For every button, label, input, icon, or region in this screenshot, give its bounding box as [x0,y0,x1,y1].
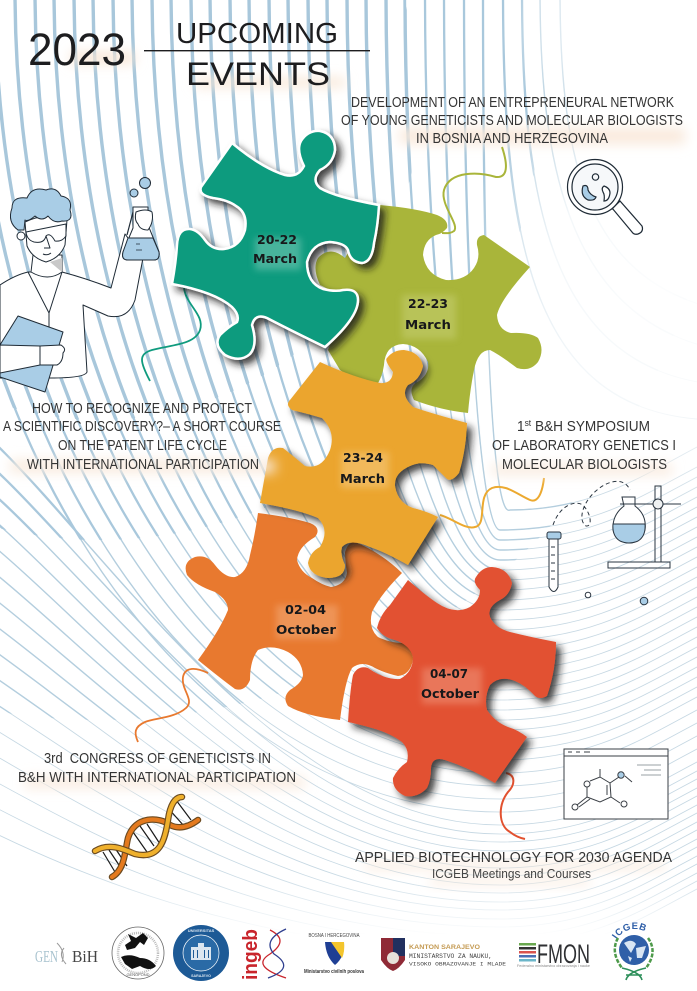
logo: GEN BiH: BiH [72,947,98,966]
puzzle piece: 20-22 March: March [253,251,297,266]
text: symposium event [492,418,676,475]
text: symposium event: OF LABORATORY GENETICS I [492,438,676,454]
string: orange [136,669,208,742]
icon: dna helix [95,797,198,877]
string: amber [440,478,544,527]
bubbles [130,178,150,197]
hair [10,189,71,230]
puzzle piece: 04-07 October: 04-07 [430,666,468,681]
text: patent life cycle event [3,401,281,473]
text: symposium event: MOLECULAR BIOLOGISTS [502,457,667,473]
text: biotechnology event: APPLIED BIOTECHNOLOGY FOR 2030 AGENDA [355,850,672,866]
text: congress event [18,751,305,788]
logo: Kanton Sarajevo: VISOKO OBRAZOVANJE I MLADE [409,962,506,968]
puzzle piece: 23-24 March: March [340,471,385,486]
logo: University of Sarajevo [173,925,229,981]
logo: University of Sarajevo: SARAJEVO [191,974,211,978]
coat [0,234,143,378]
logo: Ministry of Civil Affairs: Ministarstvo civilnih poslova [304,969,364,975]
string: olive [442,147,506,233]
logo: ingeb: ingeb [240,929,262,980]
title: upcoming events [144,18,370,92]
clipboard [0,316,63,392]
puzzle piece: 02-04 October: 02-04 [285,602,326,617]
text: biotechnology event: ICGEB Meetings and Courses [432,867,591,881]
text: symposium event: B&H SYMPOSIUM [531,419,650,435]
text: congress event: B&H WITH INTERNATIONAL PARTICIPATION [18,770,296,786]
logo: Ministry of Civil Affairs [304,933,364,975]
puzzle piece: 20-22 March: 20-22 [257,232,297,247]
face [25,216,67,262]
logo: Genofond: GENOFOND [126,972,150,977]
flask [123,207,159,260]
text: symposium event: st [525,418,532,428]
logo: ICGEB [612,922,654,980]
sleeve and hand [0,345,65,373]
icon: test tube and flask on stand [547,481,681,605]
puzzle piece: 22-23 March: 22-23 [408,296,448,311]
text: patent life cycle event: ON THE PATENT LIFE CYCLE [58,438,227,454]
icon: magnifying glass [568,160,642,234]
title: upcoming events: EVENTS [186,56,330,92]
glasses [26,224,66,242]
puzzle piece: 02-04 October: October [276,622,337,637]
icon: molecule window [564,749,668,819]
text: biotechnology event [355,850,672,884]
puzzle piece: 04-07 October: October [421,686,480,701]
text: patent life cycle event: WITH INTERNATIONAL PARTICIPATION [27,457,259,473]
logo: GEN BiH: GEN [35,947,58,966]
logo: Kanton Sarajevo: KANTON SARAJEVO [409,944,480,951]
text: congress event: 3rd CONGRESS OF GENETICISTS IN [44,751,271,767]
logo: Kanton Sarajevo [381,938,506,971]
puzzle piece: 22-23 March: March [405,317,451,332]
logo: Genofond [112,927,164,979]
logo: FMON: FMON [537,939,590,969]
title: upcoming events: UPCOMING [176,18,338,50]
logo: FMON [517,939,590,969]
puzzle piece: 23-24 March [260,350,467,578]
logo: Kanton Sarajevo: MINISTARSTVO ZA NAUKU, [409,953,492,960]
text: patent life cycle event: HOW TO RECOGNIZE AND PROTECT [32,401,252,417]
text: patent life cycle event: A SCIENTIFIC DISCOVERY?– A SHORT COURSE [3,419,281,435]
puzzle piece: 20-22 March [172,131,379,359]
logo: FMON: Federalno ministarstvo obrazovanja i nauke [517,964,590,968]
puzzle piece: 22-23 March [315,205,542,413]
logo: ingeb [240,929,286,980]
icon: scientist with flask [0,178,159,392]
text: symposium event: 1 [517,419,525,435]
logo: ICGEB: ICGEB [612,922,646,938]
puzzle piece: 23-24 March: 23-24 [343,450,383,465]
puzzle piece: 04-07 October [348,567,556,796]
text: entrepreneurial network event [341,95,685,147]
title: 2023: 2023 [28,24,126,75]
logo: Ministry of Civil Affairs: BOSNA I HERCEGOVINA [308,933,360,939]
string: red [501,773,525,839]
text: entrepreneurial network event: IN BOSNIA AND HERZEGOVINA [416,131,608,147]
string: teal [142,288,201,381]
puzzle piece: 02-04 October [186,513,413,720]
logo: University of Sarajevo: UNIVERSITAS [188,928,215,933]
logo: GEN BiH [35,943,98,966]
